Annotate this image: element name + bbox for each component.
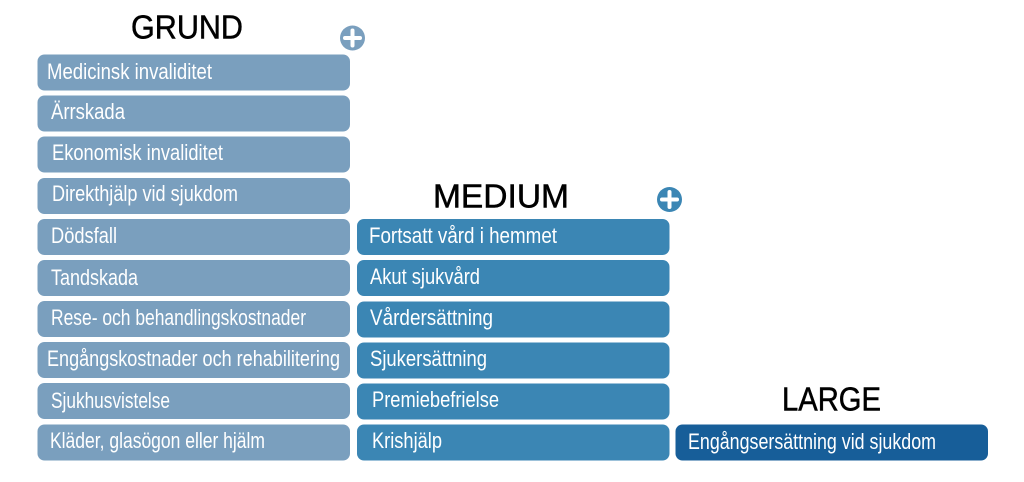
column: GRUND [38, 8, 365, 460]
item: Rese- och behandlingskostnader [38, 301, 350, 337]
item: Ekonomisk invaliditet: Ekonomisk invaliditet [52, 140, 223, 165]
item: Krishjälp: Krishjälp [372, 428, 442, 453]
item: Engångskostnader och rehabilitering [38, 342, 350, 378]
item: Medicinsk invaliditet: Medicinsk invaliditet [47, 59, 212, 84]
icon: plus GRUND [340, 26, 365, 50]
item: Engångsersättning vid sjukdom: Engångsersättning vid sjukdom [688, 429, 936, 454]
item: Premiebefrielse [357, 384, 670, 420]
item: Vårdersättning: Vårdersättning [370, 305, 493, 330]
item: Medicinsk invaliditet [38, 54, 350, 90]
item: Kläder, glasögon eller hjälm [38, 424, 350, 460]
heading: GRUND: GRUND [131, 8, 243, 46]
heading: MEDIUM: MEDIUM [433, 178, 569, 214]
icon: plus MEDIUM [657, 187, 682, 212]
item: Tandskada: Tandskada [51, 265, 139, 290]
item: Dödsfall [38, 219, 350, 255]
item: Premiebefrielse: Premiebefrielse [372, 387, 499, 412]
item: Sjukhusvistelse: Sjukhusvistelse [51, 388, 170, 413]
column: MEDIUM [357, 178, 682, 460]
item: Direkthjälp vid sjukdom [38, 178, 350, 214]
item: Engångskostnader och rehabilitering: Engångskostnader och rehabilitering [47, 346, 340, 371]
item: Akut sjukvård: Akut sjukvård [370, 264, 480, 289]
item: Tandskada [38, 260, 350, 296]
item: Ärrskada: Ärrskada [51, 99, 126, 124]
column: LARGE [676, 380, 988, 460]
item: Sjukhusvistelse [38, 383, 350, 419]
item: Direkthjälp vid sjukdom: Direkthjälp vid sjukdom [52, 181, 238, 206]
item: Engångsersättning vid sjukdom [676, 424, 988, 460]
item: Dödsfall: Dödsfall [51, 223, 117, 248]
item: Sjukersättning [357, 342, 670, 378]
item: Akut sjukvård [357, 260, 670, 296]
item: Ärrskada [38, 96, 350, 132]
item: Kläder, glasögon eller hjälm: Kläder, glasögon eller hjälm [50, 428, 265, 453]
item: Fortsatt vård i hemmet [357, 219, 670, 255]
item: Ekonomisk invaliditet [38, 136, 350, 172]
item: Rese- och behandlingskostnader: Rese- och behandlingskostnader [51, 305, 306, 330]
heading: LARGE: LARGE [782, 380, 881, 418]
item: Vårdersättning [357, 302, 670, 338]
item: Sjukersättning: Sjukersättning [370, 346, 487, 371]
item: Fortsatt vård i hemmet: Fortsatt vård i hemmet [369, 223, 557, 248]
item: Krishjälp [357, 424, 670, 460]
